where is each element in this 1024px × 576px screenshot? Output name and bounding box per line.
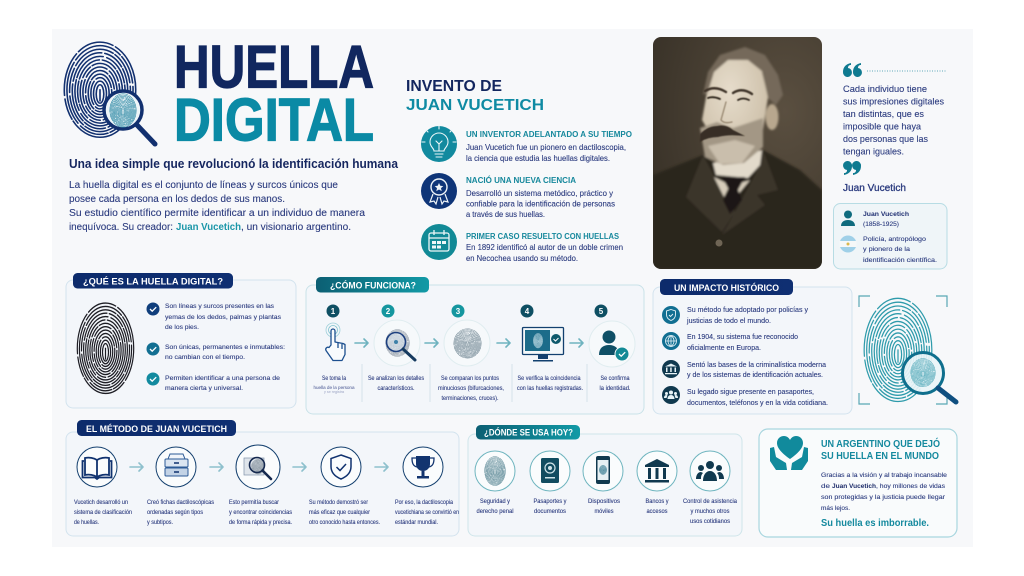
icon: open book [77,447,117,487]
inventor item 1: la ciencia que estudia las huellas digitales. [466,154,610,163]
column texts: vucetichiana se convirtió en [395,509,459,516]
inventor item 2: NACIÓ UNA NUEVA CIENCIA [466,176,576,185]
step labels: con las huellas registradas. [517,385,583,392]
inventor item 2 [421,173,615,219]
icon: closing quotation mark [843,161,861,175]
inventor item 3: En 1892 identificó al autor de un doble crimen [466,243,623,252]
arrows [355,339,583,347]
intro text: La huella digital es el conjunto de líneas y surcos únicos que [69,180,339,191]
quote: tan distintas, que es [843,109,924,119]
inventor item 2: confiable para la identificación de personas [466,200,615,208]
intro text: Su estudio científico permite identificar a un individuo de manera [69,208,366,219]
step numbers: 2 [386,307,391,316]
column texts: sistema de clasificación [74,509,132,516]
panel: ¿qué es la huella digital?: Permiten identificar a una persona de [165,375,280,382]
title: HUELLA [174,34,374,100]
icon: verified user [589,321,635,367]
panel: un impacto histórico: oficialmente en Europa. [687,343,761,352]
heading: invento de Juan Vucetich [406,78,544,114]
heading pill [476,425,580,440]
panel: un argentino que dejó su huella [759,429,957,537]
panel: ¿cómo funciona? [306,277,644,414]
biography card: Juan Vucetich [863,211,909,218]
panel: un argentino que dejó su huella: más lejos. [821,505,850,512]
column texts: y subtipos. [147,519,173,526]
step numbers: 3 [456,307,461,316]
inventor item 1 [421,126,632,163]
usage labels: Pasaportes y [534,498,567,505]
icon: calendar [421,224,457,260]
panel: un impacto histórico: Sentó las bases de la criminalística moderna [687,360,826,369]
step labels: Se comparan los puntos [441,375,499,382]
panel: un argentino que dejó su huella: UN ARGENTINO QUE DEJÓ [821,438,940,450]
icon: teal fingerprint with scanner frame and magnifier [859,296,956,404]
column texts: estándar mundial. [395,519,438,526]
intro text: Juan Vucetich [176,222,241,233]
panel: un impacto histórico: Su legado sigue presente en pasaportes, [687,387,814,396]
icon: file drawers [156,447,196,487]
icon: pointing hand [326,323,345,360]
usage labels: Seguridad y [480,498,511,505]
inventor item 1: Juan Vucetich fue un pionero en dactiloscopia, [466,143,626,152]
biography card: identificación científica. [863,257,937,264]
panel: un argentino que dejó su huella: Gracias a la visión y al trabajo incansable [821,472,947,479]
inventor item 2: Desarrolló un sistema metódico, práctico y [466,189,613,198]
usage labels [476,498,738,525]
icon: globe [662,332,680,350]
column texts: Esto permitía buscar [229,499,279,506]
panel: ¿qué es la huella digital?: no cambian con el tiempo. [165,354,245,361]
icon: monitor with check [522,328,564,362]
inventor item 3: en Necochea usando su método. [466,254,578,263]
icon: light bulb [421,126,457,162]
icon: opening quotation mark [843,63,862,77]
quote: tengan iguales. [843,146,904,156]
arrows [130,463,388,471]
step numbers: 1 [331,307,336,316]
panel: un argentino que dejó su huella: son protegidas y la justicia puede llegar [821,494,946,501]
panel: un impacto histórico [653,279,852,414]
icon: shield check [321,447,361,487]
heading pill: UN IMPACTO HISTÓRICO [674,282,779,294]
column texts: Su método demostró ser [309,499,368,506]
step labels: minuciosos (bifurcaciones, [438,385,504,392]
heading: invento de Juan Vucetich: INVENTO DE [406,78,502,95]
column texts: Vucetich desarrolló un [74,499,128,506]
quote: Juan Vucetich [843,183,906,194]
panel: un argentino que dejó su huella: Su huella es imborrable. [821,517,929,529]
icon: black fingerprint [77,303,134,393]
check 3 [146,372,160,386]
column texts: otro conocido hasta entonces. [309,519,380,526]
panel: un impacto histórico: y de los sistemas de identificación actuales. [687,370,823,379]
column texts [74,499,459,526]
column texts: ordenadas según tipos [147,509,203,516]
title: DIGITAL [174,86,374,154]
icon: shield [662,306,680,324]
panel: un argentino que dejó su huella: Juan Vucetich [832,483,876,490]
step numbers: 5 [599,307,604,316]
usage labels: móviles [594,508,614,515]
panel: ¿qué es la huella digital?: manera cierta y universal. [165,385,243,392]
quote: sus impresiones digitales [843,96,944,106]
step numbers: 4 [525,307,530,316]
heading pill: EL MÉTODO DE JUAN VUCETICH [86,423,227,435]
usage labels: documentos [534,508,566,515]
icon: fingerprint logo with magnifier [64,42,155,144]
step labels: Se analizan los detalles [368,375,424,382]
heading pill [77,420,236,436]
biography card: Policía, antropólogo [863,236,926,243]
usage labels: Control de asistencia [683,498,738,505]
quote: imposible que haya [843,122,922,132]
step labels: terminaciones, cruces). [442,395,499,402]
step labels: huella de la persona [314,385,355,391]
panel: un argentino que dejó su huella: de [821,483,830,490]
heading pill [316,277,429,292]
panel: ¿dónde se usa hoy? [468,425,742,536]
step labels [314,375,631,402]
icon: passport [530,451,570,491]
usage labels: derecho penal [476,508,514,515]
usage labels: Bancos y [646,498,669,505]
step labels: y se registra [324,390,345,394]
column texts: más eficaz que cualquier [309,509,370,516]
icon: magnifier on record [236,445,280,489]
panel: ¿qué es la huella digital?: Son únicas, permanentes e inmutables: [165,344,285,351]
biography card [834,204,947,269]
icon: bank [637,451,677,491]
icon: institution [662,360,680,378]
check 1 [146,302,160,316]
icon: trophy [403,447,443,487]
subtitle: Una idea simple que revolucionó la identificación humana [69,156,399,171]
inventor item 2: a través de sus huellas. [466,210,545,219]
column texts: y encontrar coincidencias [229,509,292,516]
biography card: (1858-1925) [863,221,899,228]
icon: compared fingerprint [444,320,490,366]
icon: security fingerprint [475,451,515,491]
heading pill: ¿DÓNDE SE USA HOY? [484,426,573,438]
step numbers [326,304,608,318]
heading: invento de Juan Vucetich: JUAN VUCETICH [406,97,544,114]
intro text: posee cada persona en los dedos de sus manos. [69,194,285,205]
panel: un impacto histórico: documentos, teléfonos y en la vida cotidiana. [687,398,828,407]
panel: un impacto histórico: Su método fue adoptado por policías y [687,305,808,314]
intro text: inequívoca. Su creador: [69,222,173,233]
panel: el método de Juan Vucetich [66,420,459,536]
intro text: , un visionario argentino. [241,222,351,233]
heading pill: ¿QUÉ ES LA HUELLA DIGITAL? [83,276,223,288]
heading pill [73,273,233,288]
heading pill [660,279,793,295]
check 2 [146,342,160,356]
icon: magnified fingerprint [374,320,420,366]
quote: dos personas que las [843,134,928,144]
step labels: Se verifica la coincidencia [518,375,581,382]
inventor item 3: PRIMER CASO RESUELTO CON HUELLAS [466,232,620,241]
panel: ¿qué es la huella digital?: Son líneas y surcos presentes en las [165,303,275,310]
icon: people [662,386,680,404]
title [174,34,374,154]
biography card: y pionero de la [863,246,910,253]
usage labels: Dispositivos [588,498,620,505]
column texts: Creó fichas dactiloscópicas [147,499,214,506]
icon: medal [421,173,457,209]
icon: heart in hands [770,436,808,470]
panel: ¿qué es la huella digital?: yemas de los dedos, palmas y plantas [165,314,282,321]
panel: un impacto histórico: justicias de todo el mundo. [686,316,771,325]
panel: ¿qué es la huella digital? [66,273,296,408]
usage labels: y muchos otros [690,508,730,515]
usage labels: accesos [646,508,668,515]
icon: person [841,210,855,226]
portrait photo of Juan Vucetich [653,37,822,269]
inventor item 1: UN INVENTOR ADELANTADO A SU TIEMPO [466,130,632,139]
panel: un argentino que dejó su huella: SU HUELLA EN EL MUNDO [821,451,939,462]
icon: Argentine flag [840,236,856,252]
usage labels: usos cotidianos [690,518,730,525]
quote [843,63,946,194]
inventor item 3 [421,224,623,263]
panel: un argentino que dejó su huella: , hoy millones de vidas [876,483,946,490]
intro text [69,180,366,233]
heading pill: ¿CÓMO FUNCIONA? [330,280,416,292]
panel: un impacto histórico: En 1904, su sistema fue reconocido [687,332,798,341]
icon: mobile device [583,451,623,491]
step labels: Se confirma [600,375,630,382]
panel: ¿qué es la huella digital?: de los pies. [165,324,199,331]
step labels: característicos. [378,385,415,392]
column texts: de huellas. [74,519,99,526]
column texts: Por eso, la dactiloscopia [395,499,454,506]
column texts: de forma rápida y precisa. [229,519,292,526]
quote: Cada individuo tiene [843,84,927,94]
step labels: Se toma la [322,375,346,382]
icon: people group [690,451,730,491]
step labels: la identidad. [600,385,631,392]
